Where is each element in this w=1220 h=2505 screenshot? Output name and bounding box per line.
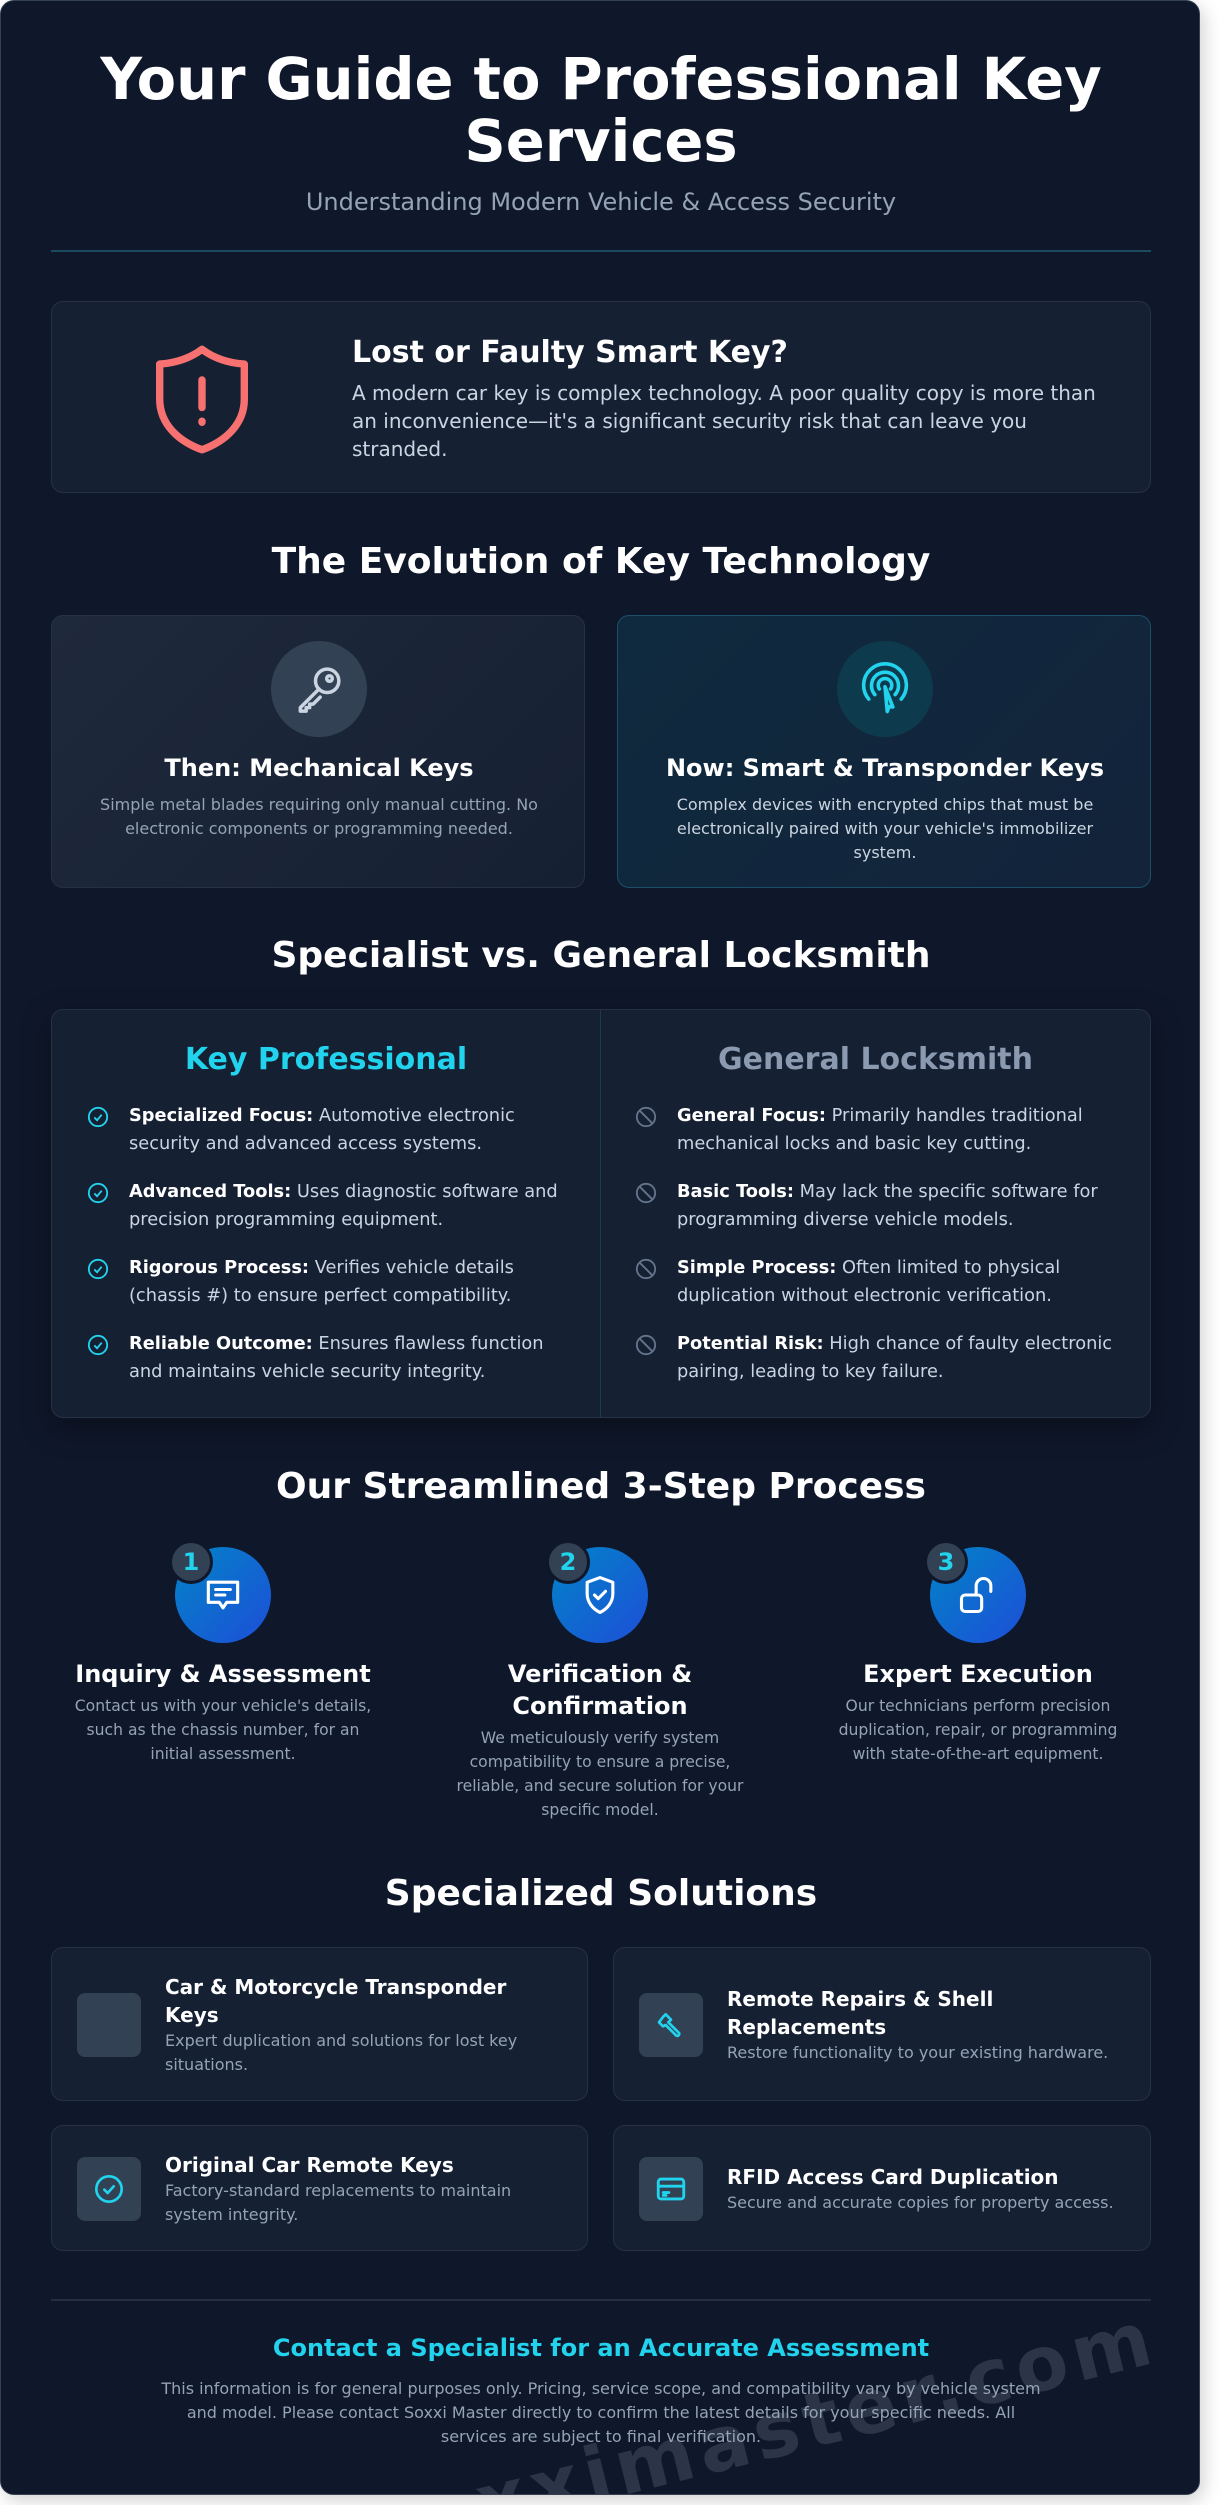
solution: transponder: Expert duplication and solutions for lost key situations.	[165, 2031, 517, 2074]
disclaimer: This information is for general purposes only. Pricing, service scope, and compatibility vary by vehicle system and model. Please contact Soxxi Master directly to confirm the latest details for your specific needs. All services are subject to final verification.	[161, 2379, 1041, 2446]
solution: original remotes: Factory-standard replacements to maintain system integrity.	[165, 2181, 511, 2224]
icon: shield check	[552, 1547, 648, 1643]
item: Basic Tools: May lack the specific software for programming diverse vehicle models.	[677, 1181, 1098, 1230]
title: Services	[464, 108, 738, 175]
solution: rfid: RFID Access Card Duplication	[727, 2165, 1059, 2189]
step 2	[457, 1543, 744, 1819]
icon: chat: 1	[183, 1548, 199, 1576]
solution: original remotes: Original Car Remote Keys	[165, 2153, 454, 2177]
solution: remote repairs: Restore functionality to your existing hardware.	[727, 2043, 1108, 2062]
heading: evolution: The Evolution of Key Technology	[272, 541, 930, 582]
step 2: We meticulously verify system compatibility to ensure a precise, reliable, and secure solution for your specific model.	[457, 1729, 743, 1819]
item: Potential Risk: High chance of faulty electronic pairing, leading to key failure.	[677, 1333, 1112, 1382]
icon: unlock	[930, 1547, 1026, 1643]
step 1: Contact us with your vehicle's details, such as the chassis number, for an initial assessment.	[75, 1697, 371, 1763]
title	[100, 46, 1102, 175]
step 1	[75, 1543, 371, 1763]
item: Reliable Outcome: Ensures flawless function and maintains vehicle security integrity.	[129, 1333, 544, 1382]
card title: Then: Mechanical Keys	[164, 754, 474, 782]
solution: transponder: Car & Motorcycle Transponder Keys	[165, 1975, 506, 2027]
solution: transponder	[51, 1947, 588, 2101]
solution: remote repairs: Remote Repairs & Shell Replacements	[727, 1987, 993, 2039]
solution: rfid	[613, 2125, 1151, 2251]
icon: shield check: 2	[560, 1548, 576, 1576]
item: Specialized Focus: Automotive electronic security and advanced access systems.	[129, 1105, 515, 1154]
title: Your Guide to Professional Key	[100, 46, 1102, 113]
column: key professional	[88, 1042, 558, 1382]
heading: solutions: Specialized Solutions	[385, 1873, 817, 1914]
icon: check circle	[77, 2157, 141, 2221]
panel: mechanical keys	[51, 615, 585, 888]
heading: General Locksmith	[718, 1042, 1033, 1077]
icon: touch	[837, 641, 933, 737]
icon: card	[639, 2157, 703, 2221]
item: Rigorous Process: Verifies vehicle details (chassis #) to ensure perfect compatibility.	[129, 1257, 514, 1306]
alert text: A modern car key is complex technology. A poor quality copy is more than an inconvenience—it's a significant security risk that can leave you stranded.	[352, 381, 1096, 461]
card title: Now: Smart & Transponder Keys	[666, 754, 1104, 782]
item: General Focus: Primarily handles traditional mechanical locks and basic key cutting.	[677, 1105, 1083, 1154]
panel: smart keys	[617, 615, 1151, 888]
footer heading: Contact a Specialist for an Accurate Assessment	[273, 2334, 929, 2362]
heading: process: Our Streamlined 3-Step Process	[276, 1466, 926, 1507]
icon: empty box	[77, 1993, 141, 2057]
heading: comparison: Specialist vs. General Locksmith	[271, 935, 931, 976]
alert heading: Lost or Faulty Smart Key?	[352, 335, 788, 370]
icon: unlock: 3	[938, 1548, 954, 1576]
step 3: Expert Execution	[863, 1660, 1093, 1688]
solution: remote repairs	[613, 1947, 1151, 2101]
heading: Key Professional	[185, 1042, 467, 1077]
step 3	[839, 1543, 1117, 1763]
solution: rfid: Secure and accurate copies for property access.	[727, 2193, 1114, 2212]
icon: key	[271, 641, 367, 737]
column: general locksmith	[636, 1042, 1112, 1382]
icon: chat	[175, 1547, 271, 1643]
panel: comparison	[51, 1009, 1151, 1418]
card text: Complex devices with encrypted chips that must be electronically paired with your vehicle's immobilizer system.	[677, 795, 1093, 862]
panel: alert	[51, 301, 1151, 493]
icon: wrench	[639, 1993, 703, 2057]
item: Advanced Tools: Uses diagnostic software and precision programming equipment.	[129, 1181, 558, 1230]
card text: Simple metal blades requiring only manual cutting. No electronic components or programming needed.	[100, 795, 538, 838]
icon: shield warning	[156, 346, 248, 454]
step 1: Inquiry & Assessment	[75, 1660, 371, 1688]
item: Simple Process: Often limited to physical duplication without electronic verification.	[677, 1257, 1060, 1306]
step 2: Verification & Confirmation	[508, 1660, 692, 1720]
subtitle: Understanding Modern Vehicle & Access Security	[306, 188, 896, 216]
step 3: Our technicians perform precision duplication, repair, or programming with state-of-the-art equipment.	[839, 1697, 1117, 1763]
solution: original remotes	[51, 2125, 588, 2251]
